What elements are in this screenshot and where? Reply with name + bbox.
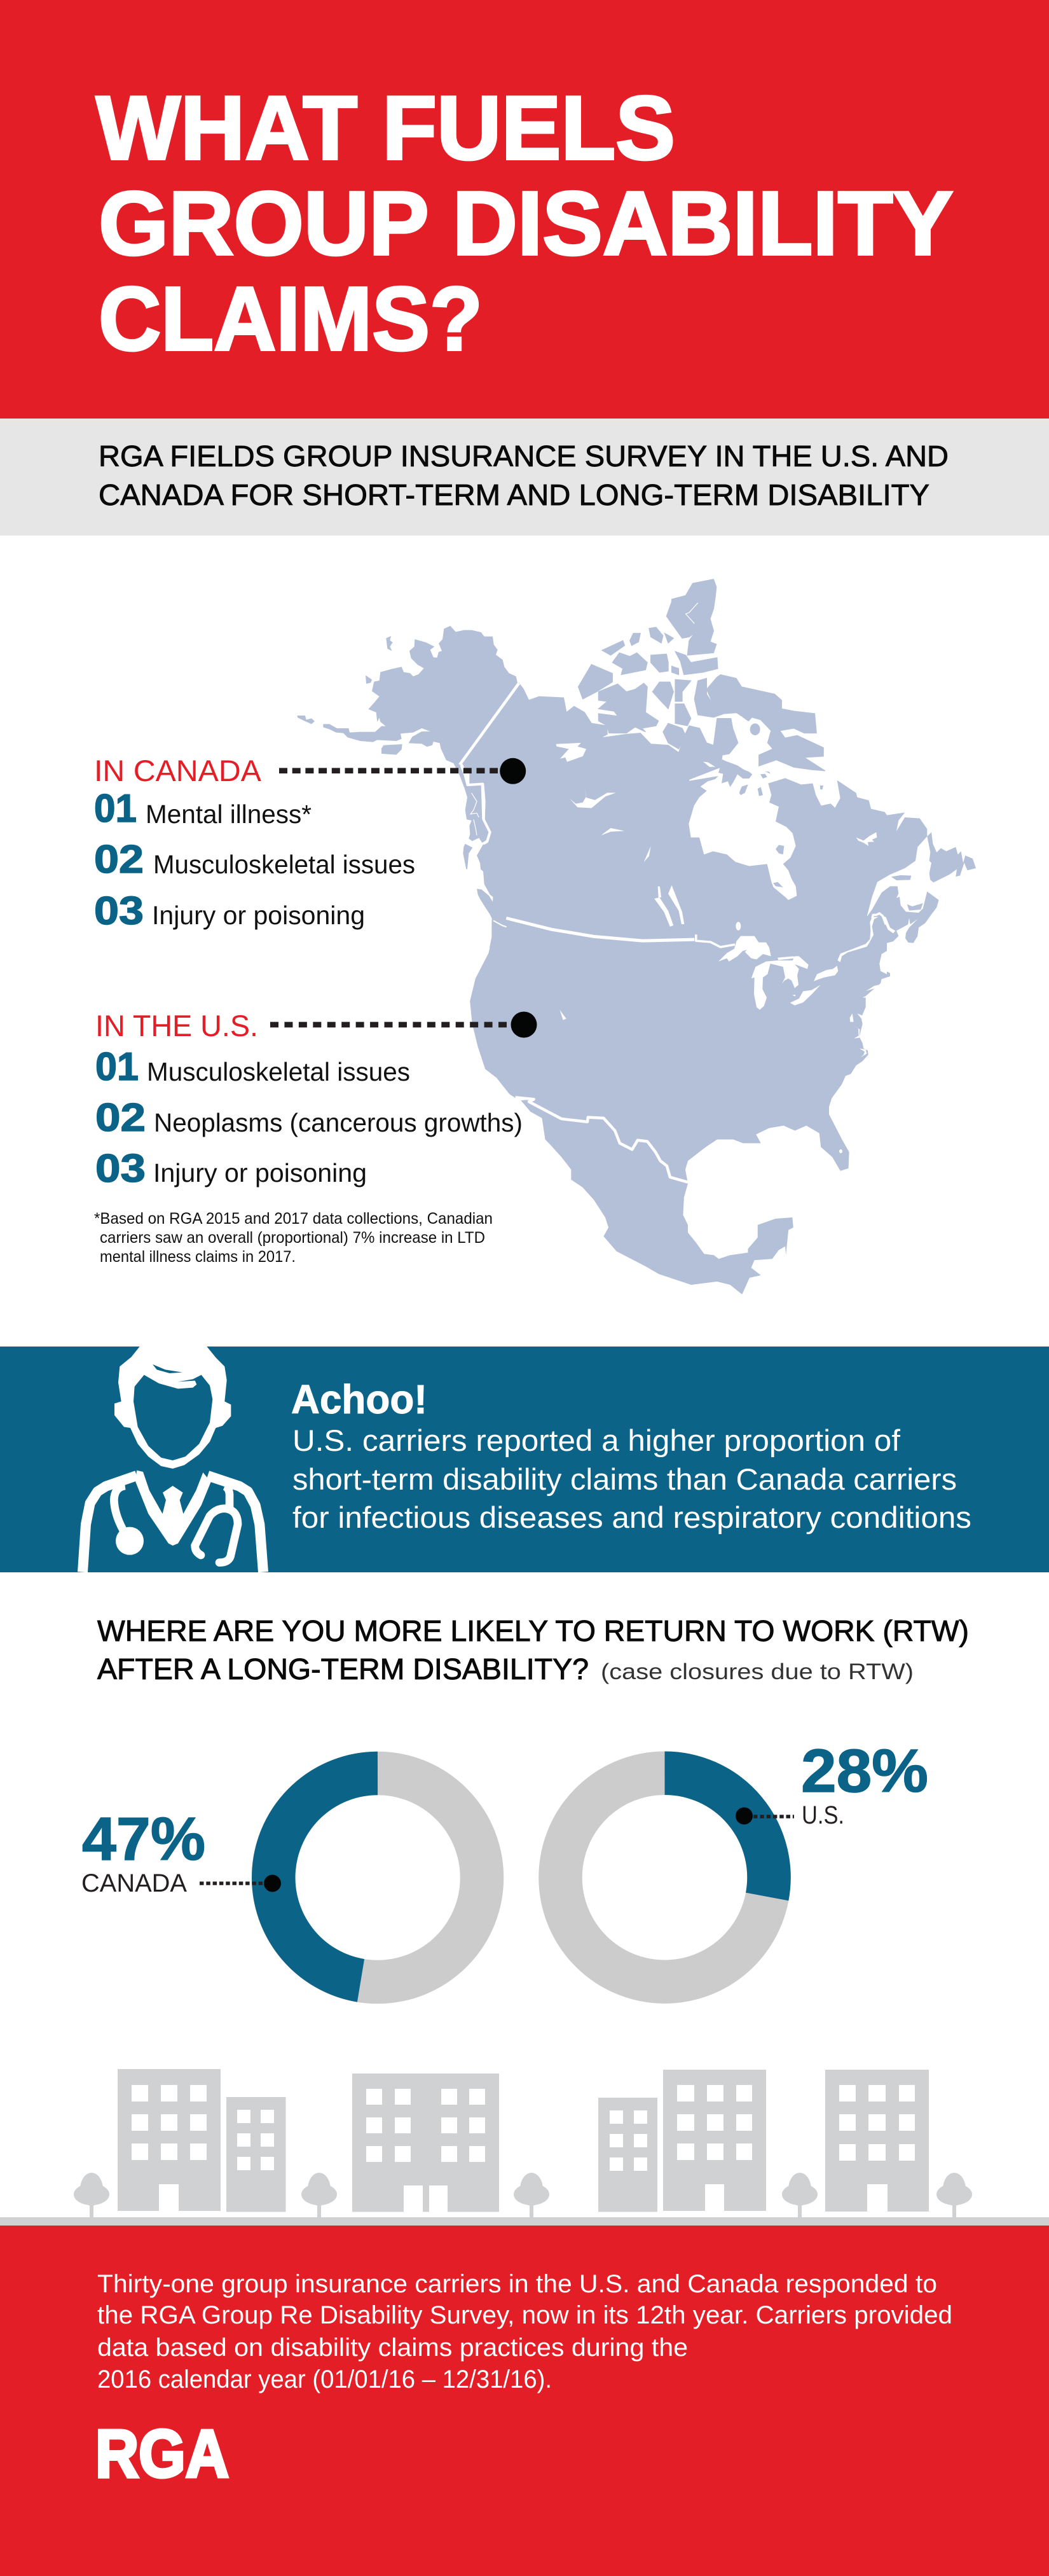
U.S. label: 28% xyxy=(801,1737,928,1805)
Canada pointer line and dot xyxy=(279,758,526,784)
footnote xyxy=(94,1210,493,1266)
In the U.S. list xyxy=(95,1009,523,1191)
Canada label: CANADA xyxy=(81,1869,187,1897)
footer text xyxy=(97,2270,952,2393)
In Canada list: 01 xyxy=(94,787,137,831)
tree 4 xyxy=(782,2173,818,2219)
building 3 xyxy=(352,2074,499,2212)
building 2 xyxy=(226,2097,286,2212)
title: WHAT FUELS xyxy=(96,78,675,179)
footer text: 2016 calendar year (01/01/16 – 12/31/16). xyxy=(97,2365,552,2393)
In the U.S. list: IN THE U.S. xyxy=(95,1009,258,1042)
In the U.S. list: 03 xyxy=(95,1147,146,1191)
In Canada list: Mental illness* xyxy=(146,800,312,829)
return to work heading xyxy=(97,1614,969,1686)
city skyline illustration xyxy=(0,2069,1049,2226)
donut chart: U.S. 28% xyxy=(561,1773,769,1982)
In the U.S. list: Neoplasms (cancerous growths) xyxy=(154,1108,523,1137)
map of North America xyxy=(297,579,976,1294)
return to work heading: WHERE ARE YOU MORE LIKELY TO RETURN TO WORK (RTW) xyxy=(97,1614,969,1647)
In the U.S. list: 02 xyxy=(95,1096,146,1140)
icon: doctor xyxy=(83,1347,263,1572)
callout: Achoo: Achoo! xyxy=(291,1376,427,1422)
Canada label xyxy=(81,1805,281,1897)
footer panel xyxy=(0,2226,1049,2576)
title: GROUP DISABILITY xyxy=(99,173,953,274)
tree 2 xyxy=(301,2173,337,2219)
subtitle text xyxy=(99,440,949,511)
subtitle text: CANADA FOR SHORT-TERM AND LONG-TERM DISABILITY xyxy=(99,478,929,511)
footnote: mental illness claims in 2017. xyxy=(100,1248,296,1266)
title xyxy=(96,78,953,370)
border lines xyxy=(460,603,886,1182)
callout: Achoo: short-term disability claims than Canada carriers xyxy=(292,1462,957,1496)
callout: Achoo xyxy=(291,1376,971,1534)
Canada label: 47% xyxy=(82,1805,205,1873)
subtitle text: RGA FIELDS GROUP INSURANCE SURVEY IN THE U.S. AND xyxy=(99,440,949,473)
In Canada list: 03 xyxy=(94,889,144,933)
building 1 xyxy=(118,2069,221,2211)
footer text: data based on disability claims practices during the xyxy=(97,2334,688,2362)
callout: Achoo: for infectious diseases and respiratory conditions xyxy=(292,1500,971,1534)
title: CLAIMS? xyxy=(99,268,483,370)
donut chart: Canada 47% xyxy=(273,1773,482,1982)
building 5 xyxy=(663,2070,766,2211)
tree 3 xyxy=(514,2173,549,2219)
In the U.S. list: Injury or poisoning xyxy=(153,1158,367,1188)
In the U.S. list: Musculoskeletal issues xyxy=(147,1057,410,1086)
tree 5 xyxy=(936,2173,972,2219)
eastern Canada xyxy=(668,723,976,954)
In Canada list: IN CANADA xyxy=(94,754,262,787)
callout: Achoo: U.S. carriers reported a higher proportion of xyxy=(292,1423,901,1457)
U.S. label: U.S. xyxy=(802,1801,844,1829)
tree 1 xyxy=(74,2173,109,2219)
In Canada list: 02 xyxy=(94,838,144,882)
footnote: carriers saw an overall (proportional) 7% increase in LTD xyxy=(100,1229,485,1247)
subtitle band xyxy=(0,419,1049,536)
In the U.S. list: 01 xyxy=(95,1045,139,1089)
header panel xyxy=(0,0,1049,419)
U.S. pointer line and dot xyxy=(270,1011,537,1038)
U.S. label xyxy=(736,1737,928,1829)
logo: RGA: RGA xyxy=(95,2416,229,2491)
In Canada list: Injury or poisoning xyxy=(152,901,365,930)
return to work heading: AFTER A LONG-TERM DISABILITY? xyxy=(97,1652,589,1686)
building 6 xyxy=(825,2070,929,2212)
lakes and water xyxy=(556,716,895,1153)
Pacific northwest coast xyxy=(453,763,530,948)
Achoo panel xyxy=(0,1347,1049,1572)
building 4 xyxy=(598,2098,657,2212)
footnote: *Based on RGA 2015 and 2017 data collections, Canadian xyxy=(94,1210,493,1228)
In Canada list: Musculoskeletal issues xyxy=(153,850,415,879)
In Canada list xyxy=(94,754,415,933)
footer text: Thirty-one group insurance carriers in the U.S. and Canada responded to xyxy=(97,2270,937,2298)
ground strip xyxy=(0,2217,1049,2226)
return to work heading: (case closures due to RTW) xyxy=(601,1659,914,1684)
footer text: the RGA Group Re Disability Survey, now in its 12th year. Carriers provided xyxy=(97,2301,952,2329)
